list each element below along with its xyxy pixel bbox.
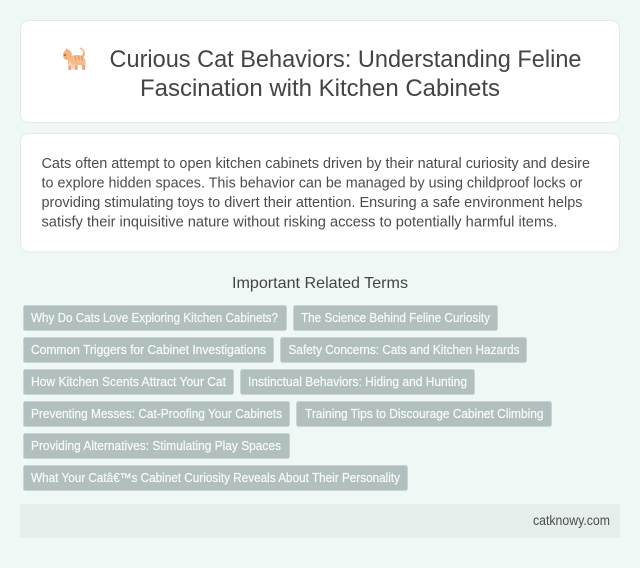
title text: Fascination with Kitchen Cabinets [140, 75, 500, 102]
tag [24, 306, 286, 330]
tag: Common Triggers for Cabinet Investigations [31, 343, 266, 357]
tag [24, 434, 290, 458]
description text: satisfy their inquisitive nature without risking access to potentially harmful items. [42, 214, 558, 230]
panel: description card [20, 134, 620, 252]
tag: How Kitchen Scents Attract Your Cat [31, 375, 226, 389]
title text: Curious Cat Behaviors: Understanding Feline [110, 46, 582, 73]
tag: What Your Catâ€™s Cabinet Curiosity Reveals About Their Personality [31, 471, 401, 485]
tag: Safety Concerns: Cats and Kitchen Hazards [288, 343, 520, 357]
heading: related terms: Important Related Terms [232, 275, 408, 292]
panel: title card [20, 20, 620, 122]
footer [20, 504, 620, 538]
icon: cat [63, 48, 86, 70]
tag [280, 338, 526, 362]
tag: Preventing Messes: Cat-Proofing Your Cabinets [31, 407, 282, 421]
footer source text: catknowy.com [533, 513, 610, 528]
title text [110, 46, 582, 102]
tag [24, 370, 234, 394]
tag: Why Do Cats Love Exploring Kitchen Cabinets? [31, 311, 278, 325]
tag [296, 402, 552, 426]
tag [240, 370, 474, 394]
tag [294, 306, 498, 330]
description text: to explore hidden spaces. This behavior can be managed by using childproof locks or [42, 174, 582, 192]
description text [42, 155, 590, 230]
tag list [24, 306, 552, 490]
description text: Cats often attempt to open kitchen cabinets driven by their natural curiosity and desire [42, 155, 590, 172]
tag [24, 402, 290, 426]
tag: Providing Alternatives: Stimulating Play Spaces [31, 439, 281, 453]
tag [24, 466, 408, 490]
tag [24, 338, 274, 362]
description text: providing stimulating toys to divert their attention. Ensuring a safe environment helps [42, 194, 582, 211]
tag: The Science Behind Feline Curiosity [301, 311, 491, 325]
tag: Instinctual Behaviors: Hiding and Hunting [248, 375, 467, 389]
tag: Training Tips to Discourage Cabinet Climbing [305, 407, 544, 421]
